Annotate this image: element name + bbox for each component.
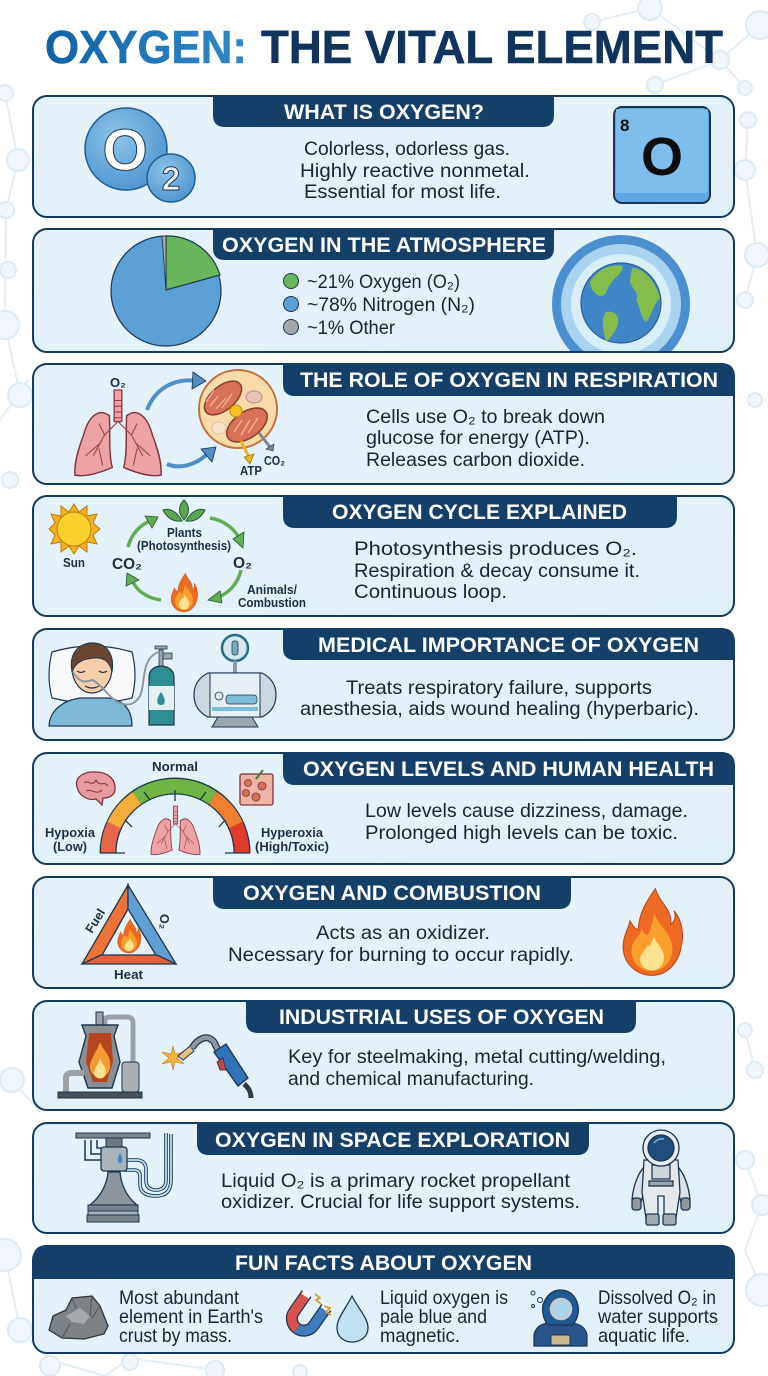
icon: flame (171, 573, 198, 612)
panel: medical (33, 628, 735, 740)
text: respiration: glucose for energy (ATP). (366, 427, 590, 449)
text: fact liquid: pale blue and (380, 1306, 487, 1328)
text: fact rock: Most abundant (119, 1287, 240, 1309)
legend: ~1% Other (307, 317, 395, 339)
icon: O2 molecule: O (102, 118, 148, 183)
text: medical: Treats respiratory failure, supports (346, 677, 652, 699)
heading: space: OXYGEN IN SPACE EXPLORATION (215, 1128, 570, 1152)
heading: oxygen cycle (283, 495, 677, 528)
text: medical (300, 677, 699, 720)
labels: gauge: Normal (152, 760, 198, 774)
panel: space (33, 1122, 734, 1233)
text: oxygen cycle: Continuous loop. (354, 581, 507, 603)
icon: fire triangle: Heat (114, 968, 144, 982)
arrow: ATP output: ATP (240, 464, 262, 478)
label: plants: Plants (167, 526, 202, 540)
icon: lungs (75, 375, 161, 476)
text: fact liquid: Liquid oxygen is (380, 1287, 508, 1309)
heading: combustion: OXYGEN AND COMBUSTION (243, 881, 541, 905)
heading: oxygen cycle: OXYGEN CYCLE EXPLAINED (332, 500, 627, 524)
icon: lungs (151, 806, 200, 855)
legend: ~78% Nitrogen (N₂) (307, 294, 475, 316)
text: respiration: Cells use O₂ to break down (366, 406, 605, 428)
icon: earth with atmosphere (552, 235, 690, 351)
title: OXYGEN: (45, 21, 247, 73)
text: what is oxygen (300, 138, 530, 203)
icon: water drop (337, 1296, 368, 1342)
label: animals combustion: Combustion (238, 596, 306, 610)
labels: gauge: (High/Toxic) (255, 840, 329, 854)
icon: O2 molecule: 2 (162, 160, 180, 197)
arrows: green cycle (126, 516, 244, 603)
icon: rocket engine (76, 1133, 171, 1222)
text: fact water (597, 1287, 718, 1347)
text: what is oxygen: Colorless, odorless gas. (304, 138, 510, 160)
heading: what is oxygen: WHAT IS OXYGEN? (284, 100, 484, 124)
text: fact liquid (380, 1287, 508, 1347)
icon: O2 molecule (85, 108, 195, 202)
pie chart (111, 236, 221, 346)
panel: industrial (33, 1000, 734, 1110)
icon: astronaut (632, 1130, 690, 1225)
arrow: ATP output (240, 441, 262, 478)
text: industrial: Key for steelmaking, metal cutting/welding, (288, 1046, 666, 1068)
panel: respiration (33, 363, 735, 484)
heading: human health (283, 752, 735, 785)
heading: what is oxygen (213, 95, 554, 127)
text: human health: Low levels cause dizziness, damage. (365, 800, 688, 822)
text: respiration (366, 406, 605, 471)
labels: CO2 and O2: CO₂ (112, 556, 142, 573)
icon: periodic table tile (614, 107, 710, 203)
icon: oxygen tank (149, 646, 174, 725)
icon: rock (49, 1296, 108, 1339)
text: fact water: aquatic life. (598, 1325, 690, 1347)
panel: human health (33, 752, 735, 864)
text: space: oxidizer. Crucial for life support systems. (221, 1191, 580, 1213)
heading: atmosphere: OXYGEN IN THE ATMOSPHERE (222, 233, 546, 257)
text: combustion (228, 922, 574, 966)
text: combustion: Necessary for burning to occur rapidly. (228, 944, 574, 966)
label: plants (137, 526, 231, 553)
icon: periodic table tile: 8 (620, 116, 629, 135)
labels: CO2 and O2 (112, 555, 252, 573)
text: combustion: Acts as an oxidizer. (316, 922, 490, 944)
panel: fun facts (33, 1245, 735, 1353)
icon: plant leaves (163, 500, 205, 521)
panel: oxygen cycle (33, 495, 734, 616)
text: fact rock (119, 1287, 263, 1347)
icon: fire triangle: O₂ (157, 914, 171, 929)
icon: magnet (283, 1291, 331, 1338)
title: THE VITAL ELEMENT (261, 21, 723, 73)
arrow: blood to cell (167, 447, 216, 466)
text: fact water: Dissolved O₂ in (598, 1287, 716, 1309)
gauge chart (100, 786, 250, 853)
icon: cell with mitochondria (198, 370, 277, 449)
text: human health: Prolonged high levels can be toxic. (365, 822, 678, 844)
heading: respiration (283, 363, 735, 396)
title (45, 21, 723, 73)
panel: what is oxygen (33, 95, 734, 217)
heading: industrial (246, 1000, 636, 1033)
legend (284, 271, 475, 339)
labels: gauge (45, 760, 329, 854)
heading: combustion (213, 876, 571, 909)
icon: sun (49, 504, 100, 570)
icon: patient on oxygen (49, 643, 158, 726)
panel: atmosphere (32, 228, 735, 353)
arrow: lungs to cell (147, 372, 206, 410)
icon: diver (531, 1290, 587, 1346)
arrow: CO2 output: CO₂ (264, 454, 285, 468)
labels: gauge: Hypoxia (45, 826, 96, 840)
text: oxygen cycle: Respiration & decay consume it. (354, 560, 640, 582)
labels: CO2 and O2: O₂ (233, 555, 252, 572)
labels: gauge: (Low) (53, 840, 87, 854)
icon: lungs: O₂ (110, 375, 126, 390)
legend: ~21% Oxygen (O₂) (307, 271, 460, 293)
labels: gauge: Hyperoxia (261, 826, 324, 840)
icon: fire triangle: Fuel (83, 906, 108, 936)
icon: hyperbaric chamber (194, 635, 276, 727)
heading: medical: MEDICAL IMPORTANCE OF OXYGEN (318, 633, 699, 657)
heading: medical (283, 628, 735, 660)
arrow: CO2 output (259, 433, 285, 468)
text: what is oxygen: Essential for most life. (304, 181, 501, 203)
text: what is oxygen: Highly reactive nonmetal. (300, 160, 530, 182)
label: plants: (Photosynthesis) (137, 539, 231, 553)
text: medical: anesthesia, aids wound healing (hyperbaric). (300, 698, 699, 720)
icon: steel furnace (58, 1012, 142, 1098)
text: oxygen cycle (354, 538, 640, 603)
label: animals combustion (238, 583, 306, 610)
text: space (221, 1170, 580, 1213)
heading: fun facts (33, 1245, 735, 1279)
heading: industrial: INDUSTRIAL USES OF OXYGEN (279, 1005, 604, 1029)
text: respiration: Releases carbon dioxide. (366, 449, 585, 471)
text: industrial: and chemical manufacturing. (288, 1068, 534, 1090)
heading: space (197, 1122, 589, 1155)
icon: fire triangle (82, 885, 176, 982)
icon: large flame (623, 889, 683, 975)
panel: combustion (33, 876, 734, 988)
icon: sun: Sun (63, 556, 85, 570)
text: fact water: water supports (597, 1306, 718, 1328)
text: human health (365, 800, 688, 844)
label: animals combustion: Animals/ (247, 583, 297, 597)
heading: human health: OXYGEN LEVELS AND HUMAN HEALTH (303, 757, 714, 781)
text: fact rock: element in Earth's (119, 1306, 263, 1328)
text: industrial (288, 1046, 666, 1090)
icon: damaged tissue (240, 770, 273, 805)
text: fact liquid: magnetic. (380, 1325, 460, 1347)
text: fact rock: crust by mass. (119, 1325, 232, 1347)
text: space: Liquid O₂ is a primary rocket propellant (221, 1170, 571, 1192)
text: oxygen cycle: Photosynthesis produces O₂. (354, 538, 637, 560)
heading: fun facts: FUN FACTS ABOUT OXYGEN (235, 1251, 532, 1275)
icon: brain (77, 772, 115, 805)
heading: respiration: THE ROLE OF OXYGEN IN RESPIRATION (300, 368, 718, 392)
icon: welding torch (162, 1038, 251, 1098)
icon: periodic table tile: O (641, 127, 683, 187)
